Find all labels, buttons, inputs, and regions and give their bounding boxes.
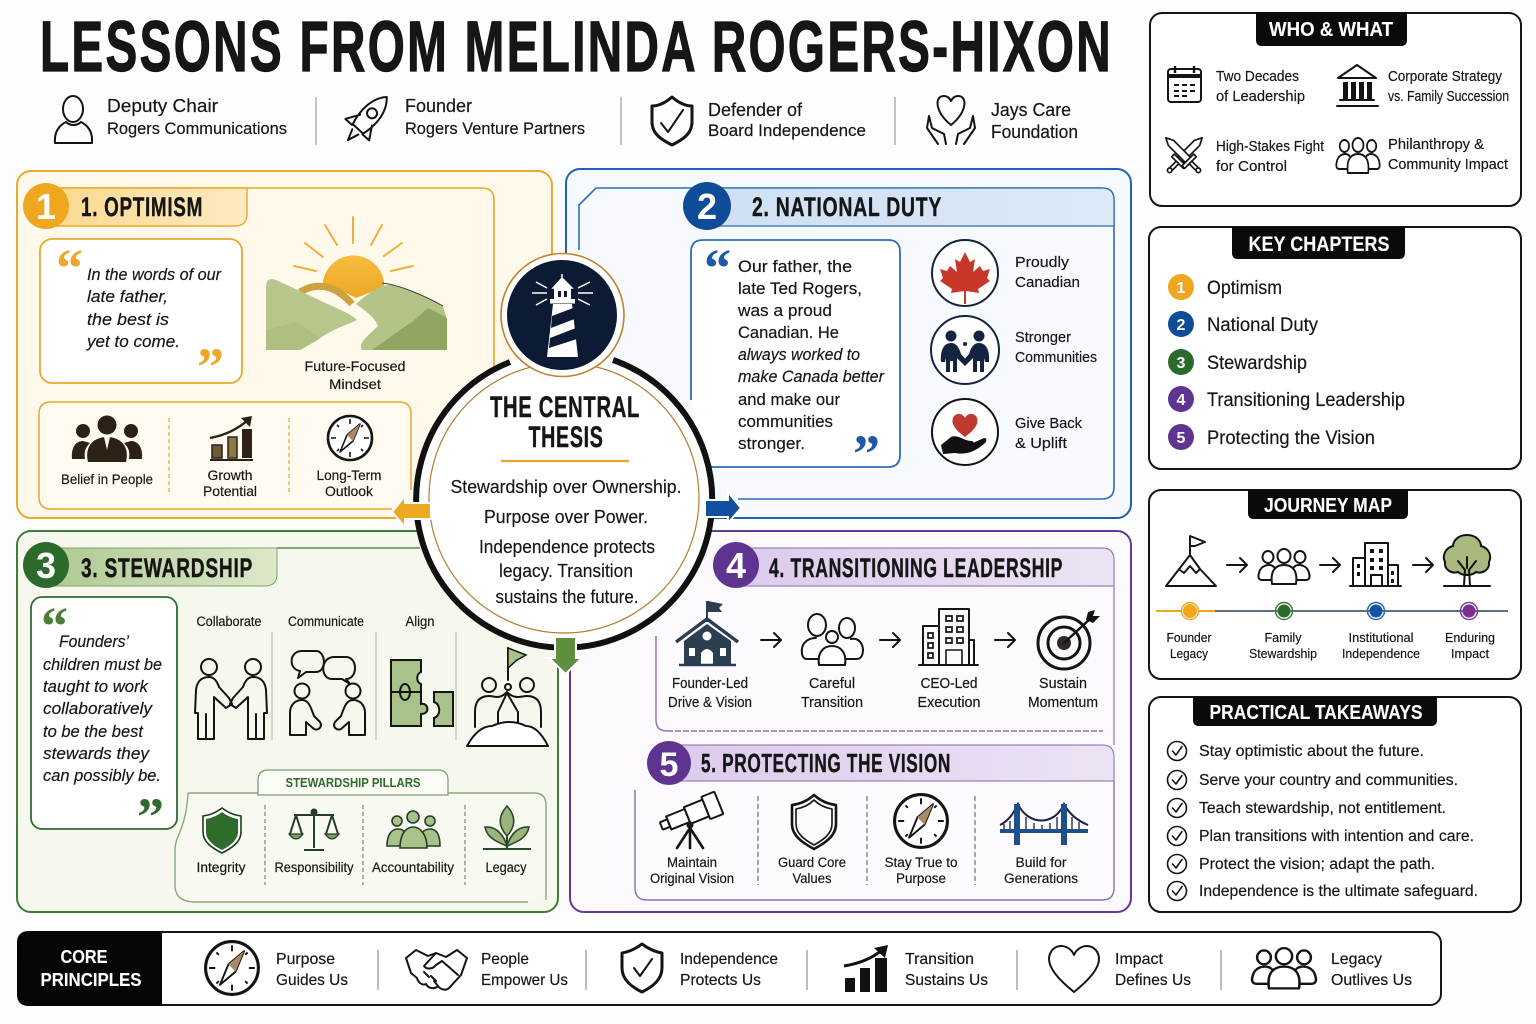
section: 5 protecting the vision — [635, 741, 1114, 900]
arrow: to optimism — [392, 496, 431, 527]
label: core principles: PRINCIPLES — [40, 970, 142, 990]
item: corporate strategy — [1337, 65, 1509, 106]
quote: founders' children: Founders’ — [59, 633, 129, 651]
pillar: legacy: Legacy — [486, 860, 527, 875]
principle: purpose: Purpose — [276, 951, 335, 968]
principle: independence: Independence — [680, 951, 778, 968]
label: stewardship pillars tab — [258, 770, 448, 795]
quote: ted rogers proud canadian: “ — [704, 238, 731, 298]
item: build for generations: Build for — [1016, 855, 1067, 870]
quote: founders' children — [31, 596, 177, 847]
panel: who and what — [1150, 12, 1521, 206]
role: defender of board independence: Defender of — [708, 100, 803, 120]
role: deputy chair: Deputy Chair — [107, 96, 218, 116]
panel: 3 stewardship — [17, 531, 558, 912]
principle: people: People — [481, 951, 529, 968]
heading: transitioning leadership: 4 — [726, 545, 746, 586]
chapter list: Transitioning Leadership — [1207, 390, 1405, 411]
heading: optimism — [23, 183, 247, 229]
item: proudly canadian: Canadian — [1015, 274, 1080, 291]
quote: ted rogers proud canadian: was a proud — [737, 301, 832, 320]
step: sustain momentum — [1028, 610, 1100, 711]
panel: practical takeaways — [1149, 697, 1521, 912]
tab: practical takeaways — [1193, 697, 1437, 726]
heading: national duty — [683, 182, 1114, 230]
panel: core principles — [17, 931, 1441, 1006]
step: careful transition: Careful — [809, 676, 855, 692]
tab: journey map — [1248, 490, 1408, 519]
icon: institution — [1350, 543, 1401, 586]
icon: mountain — [1166, 536, 1216, 586]
item: philanthropy: Philanthropy & — [1388, 136, 1484, 153]
item: two decades — [1168, 66, 1305, 105]
step: sustain momentum: Momentum — [1028, 695, 1098, 711]
central thesis — [392, 254, 741, 674]
chapter list: 3 — [1177, 355, 1186, 372]
panel: journey map — [1149, 490, 1521, 679]
heading: stewardship — [23, 542, 277, 588]
step: ceo-led execution — [918, 609, 980, 711]
illustration: sunrise over hills — [266, 217, 447, 350]
timeline labels: Impact — [1451, 647, 1490, 661]
timeline — [1156, 602, 1508, 620]
arrow: to stewardship — [549, 637, 582, 674]
takeaway list: Stay optimistic about the future. — [1199, 743, 1424, 760]
icon: long-term outlook: Outlook — [325, 483, 374, 499]
quote: founders' children: “ — [41, 596, 68, 656]
column: align: Align — [406, 614, 434, 629]
step: founder-led — [668, 601, 752, 711]
column: align — [391, 614, 453, 726]
heading: stewardship: 3. STEWARDSHIP — [81, 553, 253, 583]
arrow: transition to ceo — [880, 633, 900, 647]
icon: lighthouse medallion — [501, 254, 624, 376]
item: high-stakes fight: for Control — [1216, 158, 1287, 175]
item: build for generations: Generations — [1004, 871, 1078, 886]
quote: ted rogers proud canadian: stronger. — [738, 434, 805, 453]
role: jays care foundation: Foundation — [991, 122, 1078, 142]
heading: protecting the vision: 5. PROTECTING THE VISION — [701, 748, 951, 778]
timeline labels — [1166, 631, 1495, 661]
item: two decades: Two Decades — [1216, 68, 1299, 85]
principle: purpose — [206, 942, 348, 994]
central thesis statement: Purpose over Power. — [484, 506, 648, 527]
takeaway list: Serve your country and communities. — [1199, 772, 1458, 789]
item: high-stakes fight: High-Stakes Fight — [1216, 138, 1325, 155]
quote: best is yet to come: the best is — [87, 311, 169, 329]
chapter list — [1168, 274, 1405, 450]
column: communicate — [288, 614, 365, 735]
tab: journey map: JOURNEY MAP — [1264, 495, 1392, 517]
quote: ted rogers proud canadian: always worked to — [738, 345, 860, 364]
item: stronger communities: Stronger — [1015, 329, 1071, 346]
central thesis statement: legacy. Transition — [499, 560, 633, 581]
takeaway list — [1168, 742, 1478, 900]
principle: independence: Protects Us — [680, 972, 761, 989]
stewardship pillars — [175, 770, 546, 902]
quote: ted rogers proud canadian: make Canada better — [738, 367, 885, 386]
panel: 1 optimism — [17, 171, 552, 518]
timeline labels: Independence — [1342, 647, 1420, 661]
item: stay true to purpose: Stay True to — [884, 855, 958, 870]
step: sustain momentum: Sustain — [1039, 676, 1087, 692]
arrow — [1227, 558, 1247, 572]
icon: growth potential — [203, 416, 257, 499]
quote: ted rogers proud canadian: late Ted Rogers, — [738, 279, 862, 298]
step: careful transition — [801, 614, 863, 711]
icon: growth potential: Growth — [208, 467, 252, 483]
pillar: responsibility: Responsibility — [274, 860, 354, 875]
pillar: accountability — [372, 811, 454, 875]
principle: transition — [844, 945, 988, 992]
timeline labels: Family — [1264, 631, 1302, 645]
pillar: integrity: Integrity — [196, 860, 246, 875]
icon: team reaching summit flag — [467, 648, 548, 746]
heading: optimism: 1 — [36, 186, 56, 227]
item: maintain original vision — [650, 792, 734, 886]
quote: founders' children: collaboratively — [43, 700, 154, 718]
chapter list: 2 — [1177, 317, 1186, 334]
item: build for generations — [1000, 804, 1088, 886]
panel: 4 and 5 leadership — [570, 531, 1131, 912]
icon: long-term outlook — [316, 416, 382, 499]
principle: legacy: Outlives Us — [1331, 972, 1412, 989]
quote: best is yet to come: ” — [197, 337, 224, 397]
tab: who and what — [1256, 12, 1407, 46]
role: jays care foundation: Jays Care — [991, 100, 1071, 120]
central thesis heading: THE CENTRAL — [490, 391, 640, 424]
heading: national duty: 2 — [697, 186, 717, 227]
principle: legacy — [1252, 948, 1412, 989]
quote: best is yet to come: late father, — [87, 288, 168, 306]
caption: future-focused mindset: Future-Focused — [304, 358, 406, 374]
icon: family — [1258, 549, 1310, 584]
principle: impact — [1049, 946, 1191, 992]
principle: impact: Impact — [1115, 951, 1164, 968]
item: give back and uplift: Give Back — [1015, 415, 1082, 432]
caption: future-focused mindset — [304, 358, 406, 392]
icon: growth potential: Potential — [203, 483, 257, 499]
central thesis statement: sustains the future. — [496, 586, 638, 607]
item: maintain original vision: Maintain — [667, 855, 717, 870]
caption: future-focused mindset: Mindset — [329, 376, 381, 392]
tab: key chapters — [1232, 227, 1405, 259]
item: stay true to purpose: Purpose — [896, 871, 946, 886]
chapter list: National Duty — [1207, 315, 1318, 336]
chapter list: 1 — [1177, 280, 1186, 297]
label: core principles: CORE — [60, 947, 108, 967]
principle: transition: Sustains Us — [905, 972, 988, 989]
item: philanthropy — [1336, 136, 1509, 173]
quote: ted rogers proud canadian: and make our — [738, 390, 840, 409]
column: communicate: Communicate — [288, 614, 364, 629]
item: guard core values: Values — [792, 871, 832, 886]
label: stewardship pillars tab: STEWARDSHIP PILLARS — [286, 776, 420, 790]
central thesis heading — [490, 391, 640, 454]
heading: national duty: 2. NATIONAL DUTY — [752, 192, 942, 222]
pillar: legacy — [483, 806, 531, 875]
section: 4 transitioning leadership — [656, 542, 1114, 745]
quote: best is yet to come: In the words of our — [87, 266, 222, 284]
item: give back and uplift — [932, 399, 1082, 465]
item: high-stakes fight — [1160, 132, 1325, 178]
quote: best is yet to come: yet to come. — [86, 333, 180, 351]
timeline labels: Founder — [1166, 631, 1212, 645]
chapter list: 5 — [1177, 430, 1186, 447]
item: corporate strategy: vs. Family Succession — [1388, 88, 1509, 105]
quote: best is yet to come: “ — [56, 238, 83, 298]
takeaway list: Protect the vision; adapt the path. — [1199, 856, 1435, 873]
tab: key chapters: KEY CHAPTERS — [1248, 233, 1390, 256]
step: careful transition: Transition — [801, 695, 863, 711]
item: stay true to purpose — [884, 795, 958, 886]
pillar: accountability: Accountability — [372, 860, 454, 875]
quote: ted rogers proud canadian: Canadian. He — [738, 323, 839, 342]
panel: key chapters — [1149, 227, 1521, 469]
timeline labels: Stewardship — [1249, 647, 1317, 661]
item: philanthropy: Community Impact — [1388, 156, 1509, 173]
step: founder-led: Drive & Vision — [668, 695, 752, 711]
step: ceo-led execution: Execution — [918, 695, 980, 711]
values strip — [39, 402, 411, 509]
heading: stewardship: 3 — [36, 545, 56, 586]
tab: practical takeaways: PRACTICAL TAKEAWAYS — [1210, 702, 1422, 724]
role: jays care foundation — [927, 96, 1078, 144]
principle: people — [406, 950, 568, 990]
item: corporate strategy: Corporate Strategy — [1388, 68, 1502, 85]
takeaway list: Teach stewardship, not entitlement. — [1199, 800, 1446, 817]
item: two decades: of Leadership — [1216, 88, 1305, 105]
quote: best is yet to come — [40, 238, 242, 397]
item: guard core values: Guard Core — [778, 855, 846, 870]
principle: independence — [622, 944, 778, 992]
timeline labels: Legacy — [1170, 647, 1209, 661]
takeaway list: Plan transitions with intention and care. — [1199, 828, 1474, 845]
arrow: founder to transition — [761, 633, 781, 647]
item: proudly canadian: Proudly — [1015, 254, 1070, 271]
central thesis heading: THESIS — [528, 421, 604, 454]
item: stronger communities: Communities — [1015, 349, 1097, 366]
quote: ted rogers proud canadian: ” — [853, 424, 880, 484]
label: core principles — [17, 931, 162, 1006]
item: give back and uplift: & Uplift — [1015, 435, 1068, 452]
step: founder-led: Founder-Led — [672, 676, 748, 692]
principle: people: Empower Us — [481, 972, 568, 989]
principle: impact: Defines Us — [1115, 972, 1191, 989]
quote: founders' children: children must be — [43, 656, 162, 674]
chapter list: Optimism — [1207, 278, 1282, 299]
column: collaborate — [195, 614, 267, 739]
central thesis statement — [450, 476, 682, 607]
pillar: responsibility — [274, 808, 354, 875]
item: guard core values — [778, 795, 846, 886]
chapter list: Protecting the Vision — [1207, 428, 1375, 449]
pillar: integrity — [196, 808, 246, 875]
central thesis statement: Stewardship over Ownership. — [450, 476, 682, 497]
takeaway list: Independence is the ultimate safeguard. — [1199, 883, 1478, 900]
role: founder: Rogers Venture Partners — [405, 119, 585, 138]
step: ceo-led execution: CEO-Led — [920, 676, 978, 692]
arrow — [1320, 558, 1340, 572]
heading: transitioning leadership: 4. TRANSITIONING LEADERSHIP — [769, 553, 1063, 583]
heading: protecting the vision — [647, 741, 1114, 785]
icon: belief in people: Belief in People — [61, 471, 153, 487]
quote: ted rogers proud canadian: communities — [738, 412, 833, 431]
timeline labels: Institutional — [1348, 631, 1414, 645]
role: founder: Founder — [405, 96, 472, 116]
icon: belief in people — [61, 416, 153, 487]
arrow — [1413, 558, 1433, 572]
quote: founders' children: ” — [137, 787, 164, 847]
icon: long-term outlook: Long-Term — [316, 467, 382, 483]
quote: founders' children: stewards they — [43, 745, 151, 763]
item: proudly canadian — [932, 240, 1080, 306]
panel: 2 national duty — [566, 169, 1131, 518]
icon: tree — [1444, 535, 1490, 586]
timeline labels: Enduring — [1445, 631, 1495, 645]
principle: transition: Transition — [905, 951, 974, 968]
item: stronger communities — [931, 316, 1097, 384]
quote: founders' children: to be the best — [43, 723, 144, 741]
role: founder — [336, 86, 585, 151]
heading: transitioning leadership — [713, 542, 1114, 588]
item: maintain original vision: Original Vision — [650, 871, 734, 886]
arrow: to national duty — [705, 492, 741, 523]
role: defender of board independence — [652, 97, 866, 145]
quote: founders' children: taught to work — [43, 678, 149, 696]
chapter list: Stewardship — [1207, 353, 1307, 374]
principle: legacy: Legacy — [1331, 951, 1382, 968]
arrow: ceo to momentum — [995, 633, 1015, 647]
role: defender of board independence: Board Independence — [708, 121, 866, 140]
quote: ted rogers proud canadian — [691, 238, 900, 484]
quote: ted rogers proud canadian: Our father, the — [738, 257, 852, 276]
role: deputy chair — [55, 96, 287, 143]
column: collaborate: Collaborate — [196, 614, 262, 629]
tab: who and what: WHO & WHAT — [1269, 19, 1393, 41]
heading: protecting the vision: 5 — [660, 746, 678, 784]
principle: purpose: Guides Us — [276, 972, 348, 989]
role: deputy chair: Rogers Communications — [107, 119, 287, 138]
chapter list: 4 — [1177, 392, 1186, 409]
heading: optimism: 1. OPTIMISM — [81, 192, 203, 222]
quote: founders' children: can possibly be. — [43, 767, 161, 785]
central thesis statement: Independence protects — [479, 536, 655, 557]
role strip — [55, 86, 1078, 151]
